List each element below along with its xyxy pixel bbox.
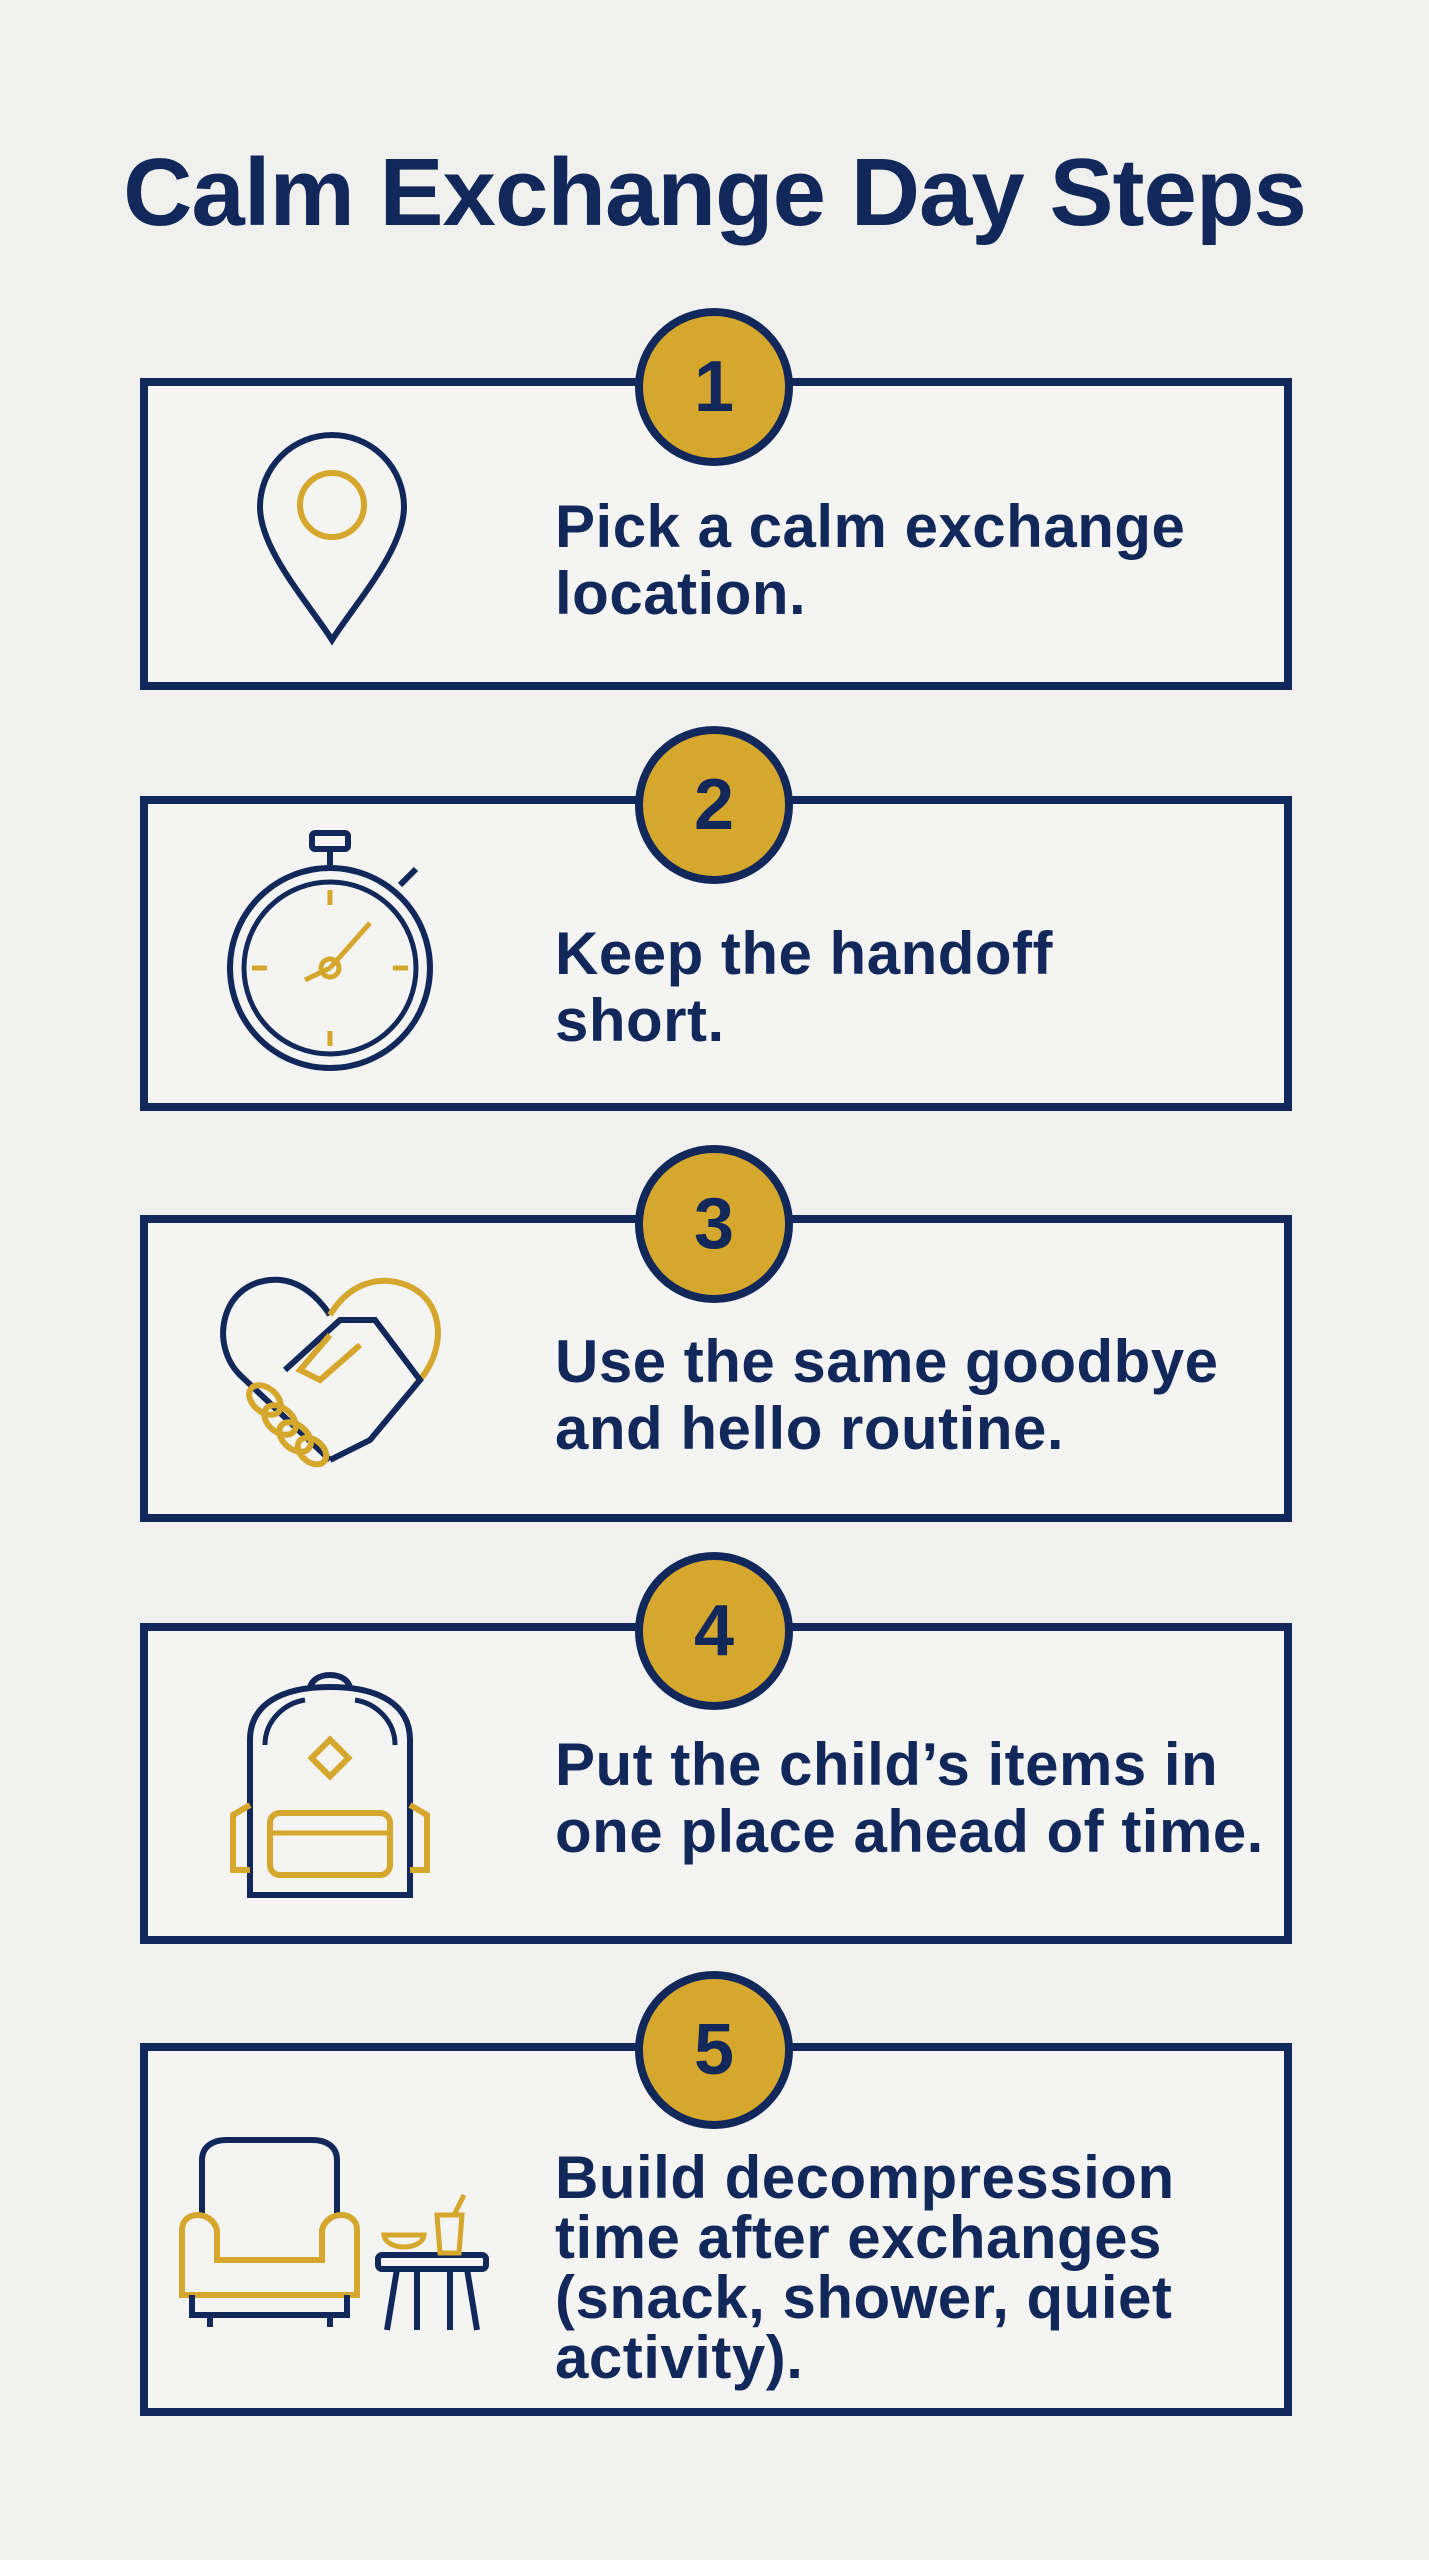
- icon: location pin: [257, 432, 407, 646]
- badge: 5: [635, 1971, 793, 2129]
- badge: 2: 2: [694, 765, 734, 845]
- badge: 3: [635, 1145, 793, 1303]
- text: step 4: [555, 1731, 1264, 1865]
- title: Calm Exchange Day Steps: [123, 139, 1306, 246]
- text: step 2: [555, 920, 1053, 1054]
- text: step 4: one place ahead of time.: [555, 1798, 1264, 1865]
- panel: step 5: [140, 2043, 1292, 2416]
- icon: armchair and side table: [179, 2137, 489, 2330]
- icon: handshake heart: [220, 1276, 441, 1468]
- text: step 2: Keep the handoff: [555, 920, 1053, 987]
- panel: step 2: [140, 796, 1292, 1111]
- text: step 1: location.: [555, 560, 806, 627]
- text: step 5: (snack, shower, quiet: [555, 2264, 1172, 2331]
- icon: stopwatch: [227, 830, 433, 1071]
- text: step 1: [555, 493, 1185, 627]
- text: step 1: Pick a calm exchange: [555, 493, 1185, 560]
- text: step 5: time after exchanges: [555, 2204, 1162, 2271]
- text: step 5: Build decompression: [555, 2144, 1175, 2211]
- text: step 3: Use the same goodbye: [555, 1328, 1219, 1395]
- badge: 1: 1: [694, 347, 734, 427]
- panel: step 1: [140, 378, 1292, 690]
- text: step 2: short.: [555, 987, 725, 1054]
- badge: 2: [635, 726, 793, 884]
- text: step 5: [555, 2144, 1175, 2391]
- badge: 3: 3: [694, 1184, 734, 1264]
- panel: step 3: [140, 1215, 1292, 1522]
- badge: 4: [635, 1552, 793, 1710]
- badge: 1: [635, 308, 793, 466]
- text: step 4: Put the child’s items in: [555, 1731, 1218, 1798]
- text: step 3: and hello routine.: [555, 1395, 1064, 1462]
- icon: backpack: [230, 1672, 430, 1898]
- text: step 3: [555, 1328, 1219, 1462]
- badge: 4: 4: [694, 1591, 734, 1671]
- panel: step 4: [140, 1623, 1292, 1944]
- text: step 5: activity).: [555, 2324, 803, 2391]
- badge: 5: 5: [694, 2010, 734, 2090]
